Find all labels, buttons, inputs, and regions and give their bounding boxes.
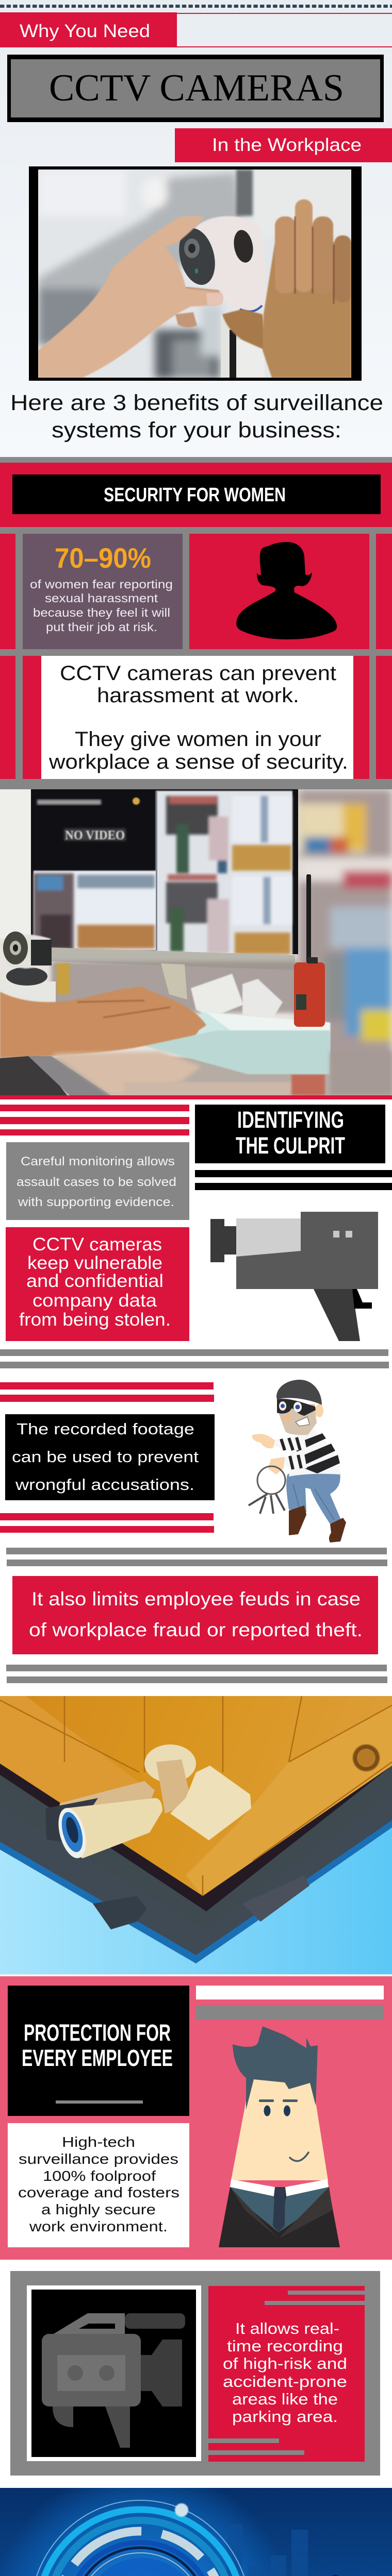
tie (273, 2187, 285, 2232)
text block: cctv prevents harassment: They give women in your (75, 728, 321, 751)
text block: real-time recording: accident-prone (223, 2372, 347, 2391)
arms (273, 1437, 307, 1450)
callout: limits employee feuds (12, 1576, 378, 1654)
subheading: 3 benefits (10, 391, 383, 443)
photo: digital padlock over audience (0, 2488, 392, 2576)
smile (290, 2153, 308, 2161)
callout: limits employee feuds: It also limits employee feuds in case (31, 1588, 361, 1609)
text block: recorded footage: can be used to prevent (12, 1448, 199, 1466)
text block: confidential data: from being stolen. (19, 1310, 171, 1330)
keyboard (196, 1012, 331, 1056)
text block: high-tech surveillance: coverage and fosters (18, 2184, 179, 2200)
text block: high-tech surveillance (8, 2123, 189, 2247)
photo: outdoor camera under wooden eave (0, 1696, 392, 1974)
panel: real-time recording (10, 2271, 380, 2476)
icon: cctv camera (210, 1212, 378, 1341)
right hand (222, 309, 266, 350)
camera sunshield (59, 1781, 155, 1806)
text block: high-tech surveillance: a highly secure (41, 2201, 156, 2217)
title: CCTV cameras: CCTV CAMERAS (49, 67, 344, 109)
illustration: businessman (219, 2026, 340, 2247)
heading: protection for every employee (8, 1986, 189, 2116)
icon: video camera (27, 2285, 201, 2461)
glass desk (0, 1057, 392, 1095)
text block: careful monitoring: Careful monitoring allows (21, 1155, 175, 1168)
text block: confidential data: CCTV cameras (32, 1234, 162, 1255)
text block: confidential data: company data (32, 1291, 157, 1311)
heading: security for women (12, 474, 381, 514)
hands (252, 1434, 275, 1448)
panel: identifying the culprit (0, 1105, 392, 1341)
eyebrows (259, 2099, 274, 2102)
photo: security monitor room (0, 789, 392, 1095)
text block: real-time recording: It allows real- (235, 2319, 339, 2337)
icon: woman silhouette (236, 542, 337, 639)
photo: hands adjusting a dome camera (29, 166, 362, 381)
heading: identifying the culprit (195, 1105, 385, 1163)
heading: security for women: SECURITY FOR WOMEN (104, 484, 286, 506)
text block: real-time recording: parking area. (232, 2408, 338, 2426)
roof gutter (0, 1793, 392, 1963)
text block: high-tech surveillance: 100% foolproof (43, 2168, 156, 2184)
shoes (289, 1505, 306, 1535)
text block: recorded footage (5, 1414, 215, 1500)
legs (286, 1471, 341, 1524)
camera body (194, 215, 266, 311)
text block: recorded footage: The recorded footage (17, 1420, 194, 1438)
radio (306, 874, 311, 963)
decorative stripes: red (0, 1105, 189, 1136)
subheading: 3 benefits: systems for your business: (52, 418, 341, 443)
text block: cctv prevents harassment: harassment at work. (97, 684, 299, 707)
text block: careful monitoring: assault cases to be solved (17, 1175, 176, 1189)
text block: real-time recording (208, 2286, 365, 2462)
text block: real-time recording: time recording (227, 2337, 343, 2355)
speaker at podium (332, 2575, 338, 2576)
panel: security for women (0, 457, 392, 789)
camera body (64, 1798, 162, 1858)
heading: protection for every employee: EVERY EMPLOYEE (22, 2045, 173, 2071)
concentric rings (30, 2500, 251, 2576)
stat card: 70–90%: put their job at risk. (46, 620, 157, 634)
body (289, 1428, 340, 1477)
shirt (230, 2187, 279, 2232)
title: CCTV cameras (7, 55, 384, 122)
heading: identifying the culprit: THE CULPRIT (236, 1132, 345, 1159)
banner: in the workplace: In the Workplace (212, 135, 362, 155)
banner: in the workplace (175, 128, 392, 162)
stat card: 70–90%: 70–90% (55, 542, 151, 574)
eyes (264, 2105, 270, 2116)
heading: identifying the culprit: IDENTIFYING (237, 1107, 344, 1133)
monitor stand (51, 947, 295, 970)
banner: why you need: Why You Need (20, 21, 150, 41)
subheading: 3 benefits: Here are 3 benefits of surveillance (10, 391, 383, 415)
small ptz camera (48, 981, 56, 1003)
camera mount (144, 1744, 196, 1783)
section: intro background (0, 0, 392, 457)
small bullet camera (191, 974, 243, 1018)
text block: real-time recording: areas like the (232, 2390, 338, 2408)
banner: why you need (0, 12, 392, 47)
key ring and keys (257, 1466, 285, 1494)
stat card: 70–90%: because they feel it will (33, 606, 170, 619)
beanie (276, 1380, 322, 1405)
left hand (38, 216, 223, 378)
suit (219, 2187, 340, 2247)
collar (230, 2179, 275, 2196)
background bars (227, 2524, 308, 2576)
text block: real-time recording: of high-risk and (223, 2354, 347, 2372)
text block: cctv prevents harassment (41, 656, 353, 779)
stat card: 70–90%: sexual harassment (45, 591, 158, 605)
photo: security monitor room: NO VIDEO (65, 828, 125, 842)
face (231, 2079, 328, 2180)
stripes: grey lower pair (6, 1665, 387, 1683)
text block: cctv prevents harassment: CCTV cameras can prevent (60, 662, 336, 685)
monitor (31, 789, 298, 954)
text block: recorded footage: wrongful accusations. (15, 1476, 194, 1494)
text block: careful monitoring: with supporting evidence. (18, 1195, 174, 1209)
head (279, 1404, 317, 1435)
heading: protection for every employee: PROTECTION FOR (24, 2020, 171, 2046)
stat card: 70–90% (23, 534, 183, 649)
hand (0, 987, 206, 1059)
icon: burglar with keys (249, 1380, 346, 1543)
text block: careful monitoring (6, 1142, 189, 1220)
text block: high-tech surveillance: surveillance provides (19, 2151, 178, 2167)
text block: confidential data: and confidential (26, 1271, 164, 1291)
gutter brackets (93, 1896, 147, 1929)
text block: confidential data: keep vulnerable (27, 1253, 162, 1273)
right blurred shelves (298, 789, 392, 1095)
callout: limits employee feuds: of workplace fraud or reported theft. (29, 1619, 363, 1640)
panel: protection for every employee (0, 1976, 392, 2260)
stripes: grey upper pair (6, 1548, 387, 1566)
panel: recorded footage (0, 1382, 215, 1533)
text block: high-tech surveillance: High-tech (62, 2134, 135, 2150)
text block: high-tech surveillance: work environment. (29, 2218, 168, 2234)
stat card: 70–90%: of women fear reporting (30, 578, 173, 591)
text block: confidential data (6, 1227, 189, 1341)
mask (277, 1399, 316, 1416)
hair (233, 2026, 318, 2110)
text block: cctv prevents harassment: workplace a sense of security. (48, 751, 348, 773)
wooden ceiling (0, 1696, 392, 1896)
